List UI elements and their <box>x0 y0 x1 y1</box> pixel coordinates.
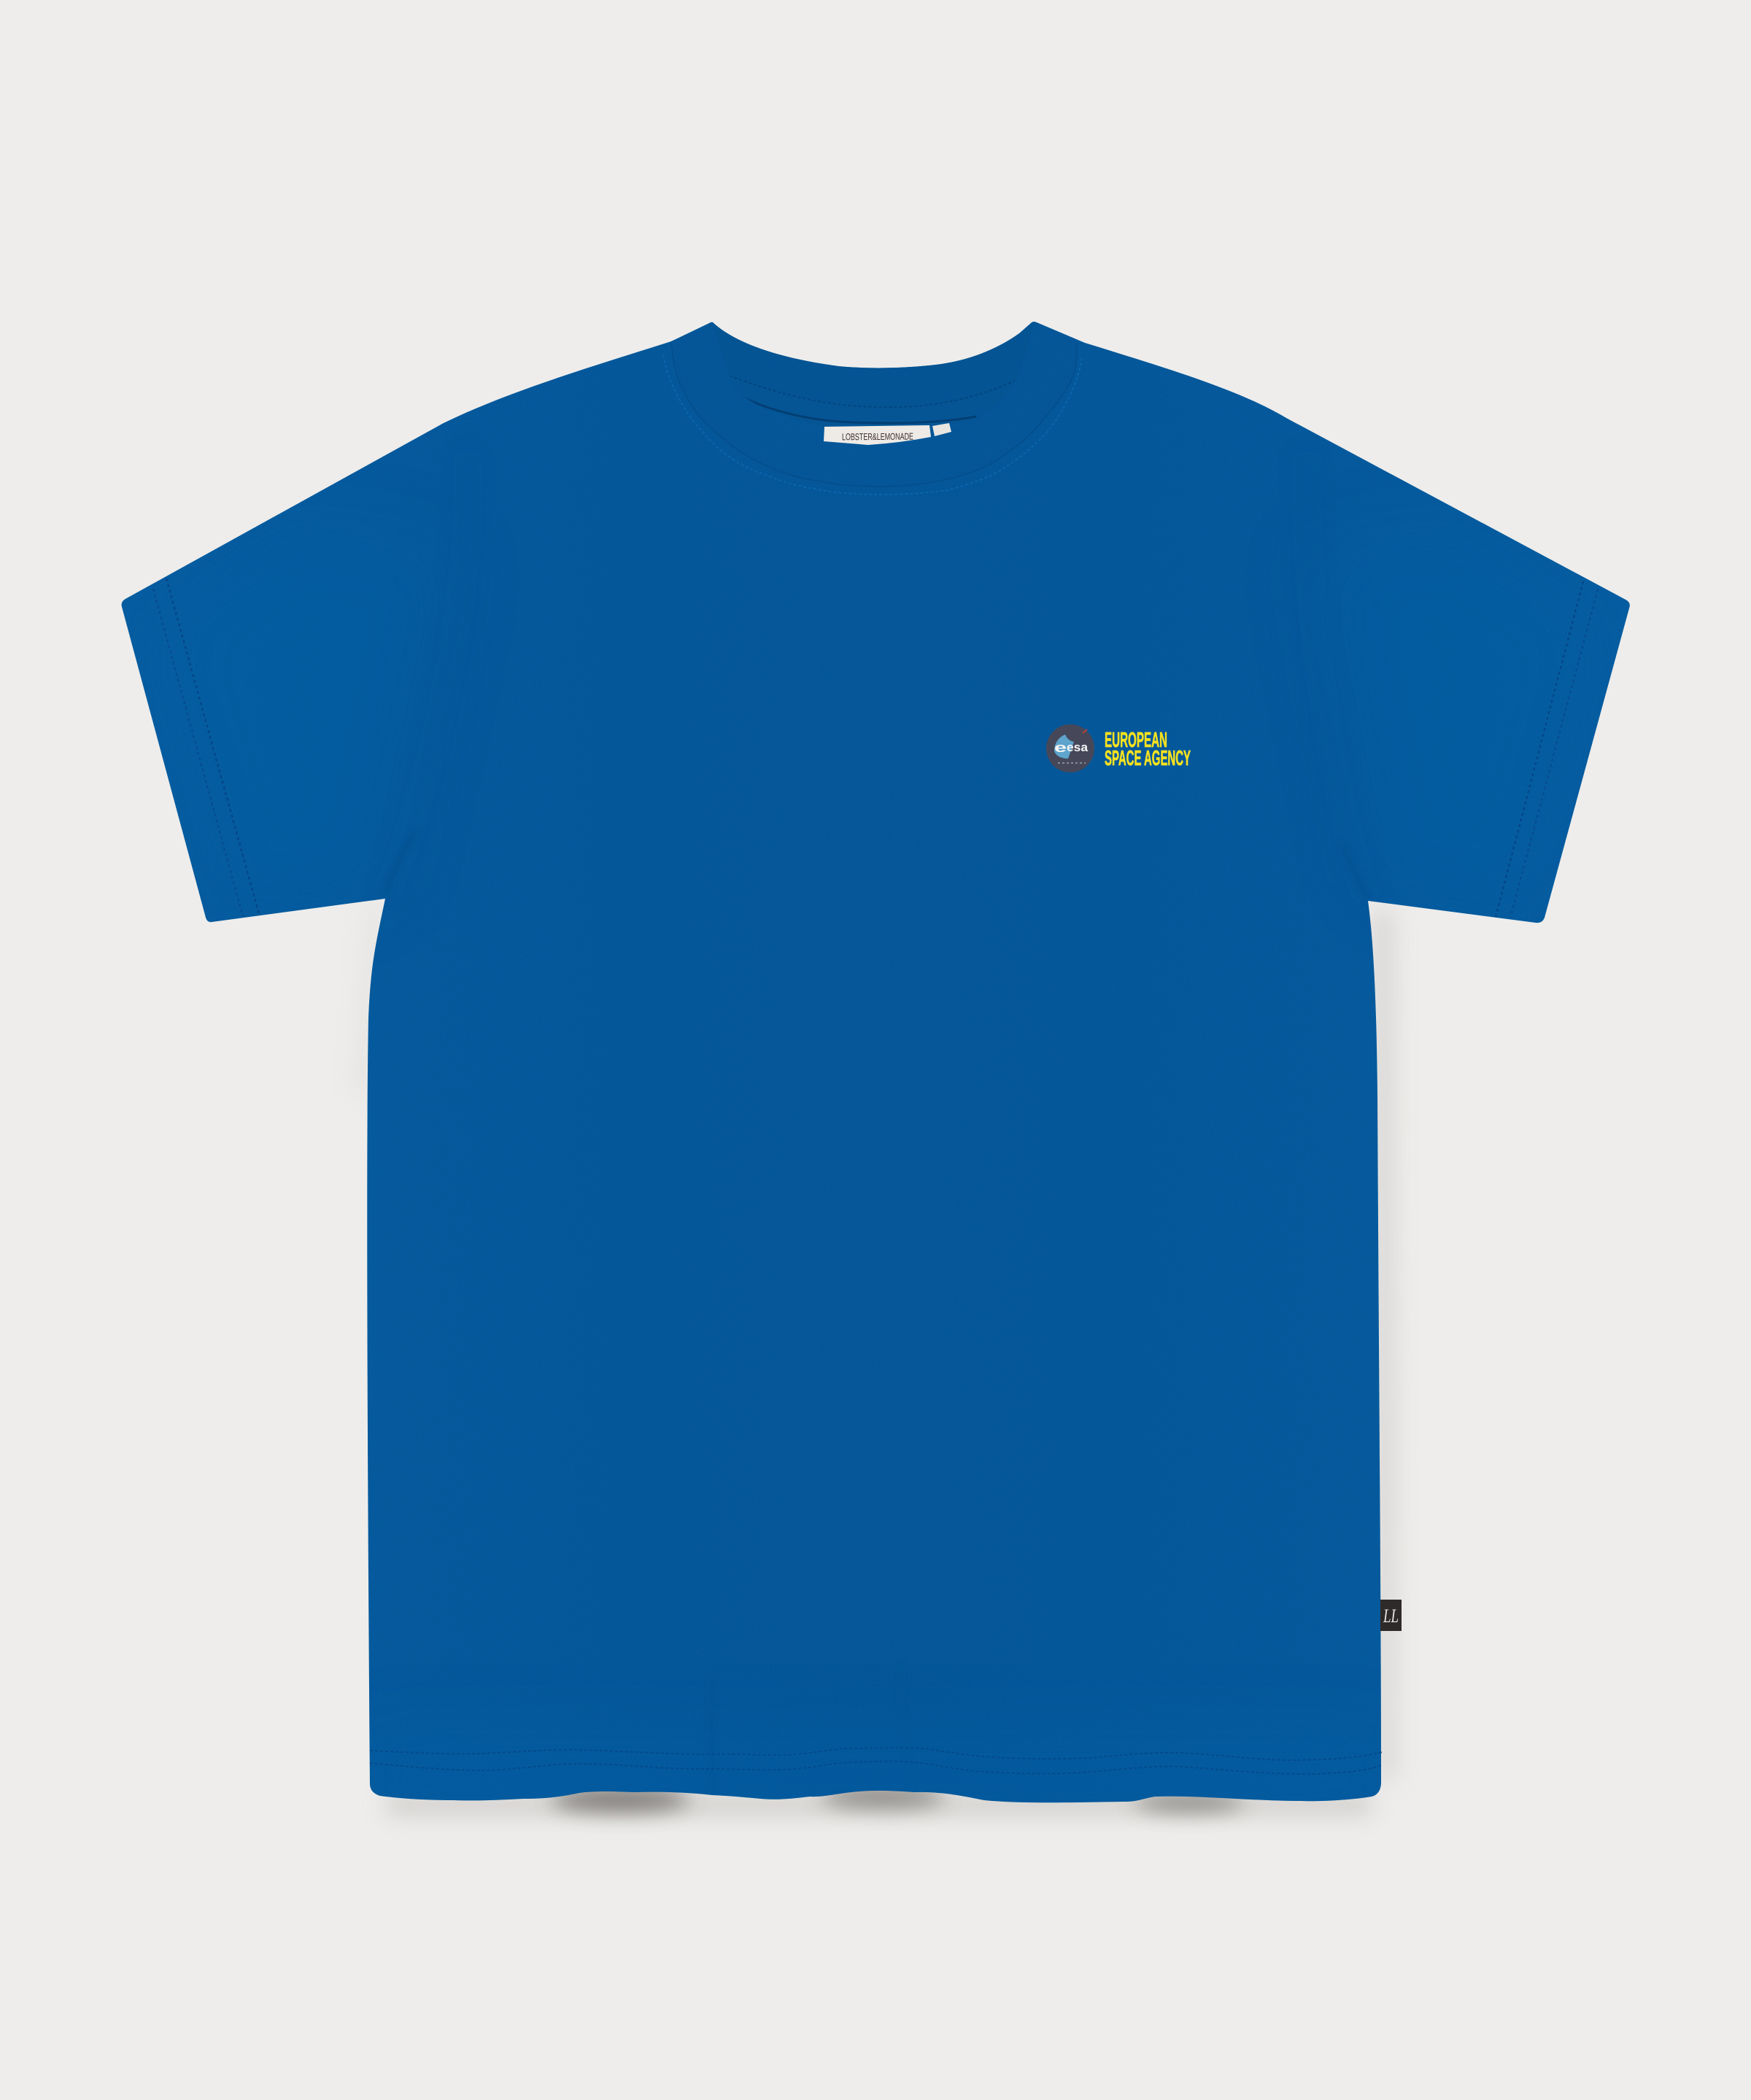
ESA emblem: esa <box>1067 740 1089 754</box>
woven brand tag <box>824 425 931 445</box>
ESA emblem <box>1046 724 1094 772</box>
collar band <box>671 322 1077 487</box>
side seam tag: LL <box>1383 1605 1399 1627</box>
fabric folds and shading <box>109 314 1642 1816</box>
t-shirt <box>109 314 1642 1816</box>
yellow wordmark: SPACE AGENCY <box>1105 747 1191 770</box>
neck label <box>824 423 951 445</box>
bottom hem stitching <box>370 1748 1383 1774</box>
sleeve hem stitching <box>153 578 1598 918</box>
yellow wordmark <box>1105 729 1191 770</box>
side seam tag <box>1380 1600 1402 1631</box>
neck interior <box>713 322 1034 428</box>
collar stitching <box>663 355 1082 495</box>
shadows under shirt <box>357 904 1395 1813</box>
woven brand tag: LOBSTER&LEMONADE <box>842 431 913 442</box>
small blank tag <box>932 423 951 436</box>
chest print: European Space Agency <box>1046 724 1191 772</box>
ESA emblem: e <box>1054 740 1067 755</box>
yellow wordmark: EUROPEAN <box>1105 729 1167 752</box>
shirt body and sleeves <box>122 322 1630 1802</box>
